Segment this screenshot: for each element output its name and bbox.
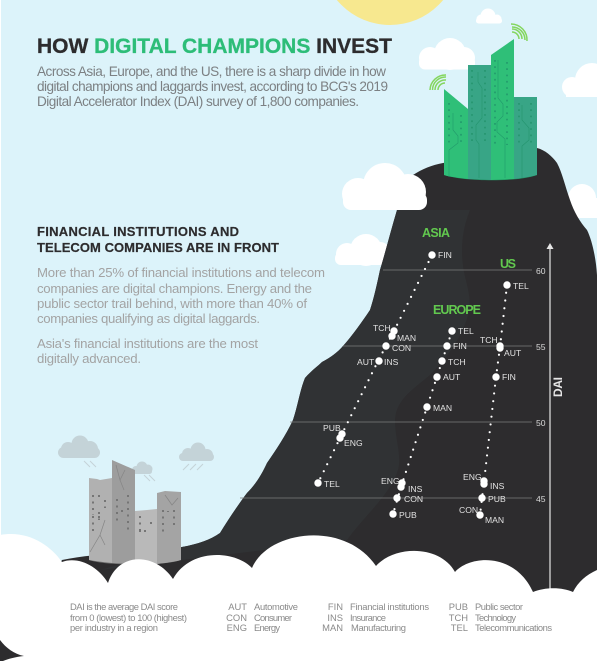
series: Europe: TCH [448, 357, 466, 367]
series: Europe: PUB [399, 510, 417, 520]
tower 3 [491, 39, 514, 180]
section body: More than 25% of financial institutions and telecom [37, 265, 325, 280]
series: US: FIN [502, 372, 516, 382]
series: Asia: CON [392, 343, 411, 353]
green towers [444, 39, 537, 180]
series: Asia: TEL [324, 479, 340, 489]
series: US: AUT [504, 348, 522, 358]
gray tower 1 [89, 478, 112, 563]
legend names: Insurance [350, 612, 386, 623]
legend abbreviations: ENG [227, 622, 247, 633]
series: Europe: TEL [458, 326, 474, 336]
legend names: Technology [475, 612, 516, 623]
intro text: digital champions and laggards invest, according to BCG's 2019 [37, 79, 388, 94]
legend abbreviations: TCH [449, 612, 468, 623]
icon: wifi right [511, 24, 527, 41]
gray tower 4 [157, 491, 181, 564]
series: Asia: INS [384, 357, 399, 367]
series: US: INS [490, 481, 505, 491]
region label: Asia: ASIA [422, 226, 450, 240]
icon: wifi left [430, 75, 446, 90]
intro text: Across Asia, Europe, and the US, there is a sharp divide in how [37, 64, 386, 79]
series: US: MAN [485, 515, 504, 525]
cracks [90, 465, 178, 552]
series: Asia [314, 250, 452, 489]
gray cloud: left [58, 436, 100, 458]
tower 4 [514, 97, 537, 179]
series: Europe [381, 326, 474, 520]
gray tower 3 [135, 509, 157, 564]
legend names: Financial institutions [350, 601, 429, 612]
legend names: Public sector [475, 601, 523, 612]
rain streaks [84, 461, 203, 481]
windows [93, 495, 174, 535]
footnote: per industry in a region [70, 622, 158, 633]
series: Europe: MAN [433, 403, 452, 413]
series: US [459, 281, 529, 525]
intro text [37, 64, 388, 109]
DAI axis arrow [546, 243, 554, 592]
mountain lighter face [100, 210, 470, 570]
gray tower 2 [112, 460, 135, 564]
legend abbreviations: TEL [451, 622, 468, 633]
gray cloud: right [179, 442, 214, 461]
series: Asia: MAN [397, 333, 416, 343]
sun [321, 0, 459, 25]
intro text: Digital Accelerator Index (DAI) survey of 1,800 companies. [37, 94, 359, 109]
series: Europe: CON [404, 494, 423, 504]
series: US: TCH [480, 335, 498, 345]
legend abbreviations [226, 601, 468, 633]
axis label: DAI: DAI [551, 377, 565, 397]
cloud: right edge upper [562, 63, 600, 97]
mountain [40, 148, 597, 600]
series: Asia: PUB [323, 423, 341, 433]
circuit traces [449, 60, 529, 178]
region label: Europe: EUROPE [433, 303, 481, 317]
region label: US: US [500, 257, 516, 271]
axis tick labels [536, 266, 546, 504]
section body [37, 265, 325, 326]
axis tick labels: 55 [536, 342, 546, 352]
legend abbreviations: INS [327, 612, 343, 623]
gray cloud: middle [131, 462, 152, 474]
series: Asia: FIN [438, 250, 452, 260]
series: Asia: AUT [357, 357, 375, 367]
cloud: top small [476, 8, 502, 24]
axis tick labels: 50 [536, 418, 546, 428]
section heading: FINANCIAL INSTITUTIONS AND [37, 224, 239, 239]
gray towers [89, 460, 181, 564]
legend names [254, 601, 552, 633]
series: Europe: FIN [453, 341, 467, 351]
section body: public sector trail behind, with more than 40% of [37, 296, 307, 311]
bottom clouds [0, 534, 600, 661]
section body: companies are digital champions. Energy and the [37, 281, 312, 296]
series: Asia: ENG [344, 438, 363, 448]
right white margin [597, 0, 600, 600]
section heading [37, 224, 279, 255]
series: Europe: AUT [443, 372, 461, 382]
series: US: PUB [488, 494, 506, 504]
legend abbreviations: MAN [322, 622, 343, 633]
grid lines [240, 270, 532, 498]
series: US: TEL [513, 281, 529, 291]
legend abbreviations: AUT [228, 601, 247, 612]
legend names: Telecommunications [475, 622, 552, 633]
legend abbreviations: PUB [449, 601, 468, 612]
cloud: behind mountain [335, 234, 395, 266]
legend names: Consumer [254, 612, 292, 623]
section note [37, 336, 258, 366]
footnote: from 0 (lowest) to 100 (highest) [70, 612, 187, 623]
axis tick labels: 60 [536, 266, 546, 276]
title: HOW DIGITAL CHAMPIONS INVEST [37, 35, 392, 58]
legend names: Automotive [254, 601, 298, 612]
footnote: DAI is the average DAI score [70, 601, 178, 612]
section note: Asia's financial institutions are the most [37, 336, 258, 351]
cloud: beside towers [419, 38, 475, 70]
series: Asia: TCH [373, 323, 391, 333]
legend names: Energy [254, 622, 280, 633]
legend names: Manufacturing [351, 622, 406, 633]
tower base [444, 172, 537, 180]
series: Europe: INS [408, 484, 423, 494]
gray base [89, 558, 181, 564]
section note: digitally advanced. [37, 351, 141, 366]
cloud: right edge lower [567, 184, 597, 218]
tower 1 [444, 89, 468, 179]
footnote [70, 601, 187, 633]
section body: companies qualifying as digital laggards. [37, 311, 260, 326]
section heading: TELECOM COMPANIES ARE IN FRONT [37, 240, 279, 255]
tower 2 [468, 65, 491, 180]
series: US: CON [459, 505, 478, 515]
legend abbreviations: FIN [328, 601, 343, 612]
axis tick labels: 45 [536, 494, 546, 504]
series: Europe: ENG [381, 476, 400, 486]
mountain foot, bottom-left [0, 640, 24, 661]
legend abbreviations: CON [226, 612, 247, 623]
series: US: ENG [463, 472, 482, 482]
circuit dots [449, 60, 531, 145]
cloud: front of mountain [342, 163, 427, 210]
